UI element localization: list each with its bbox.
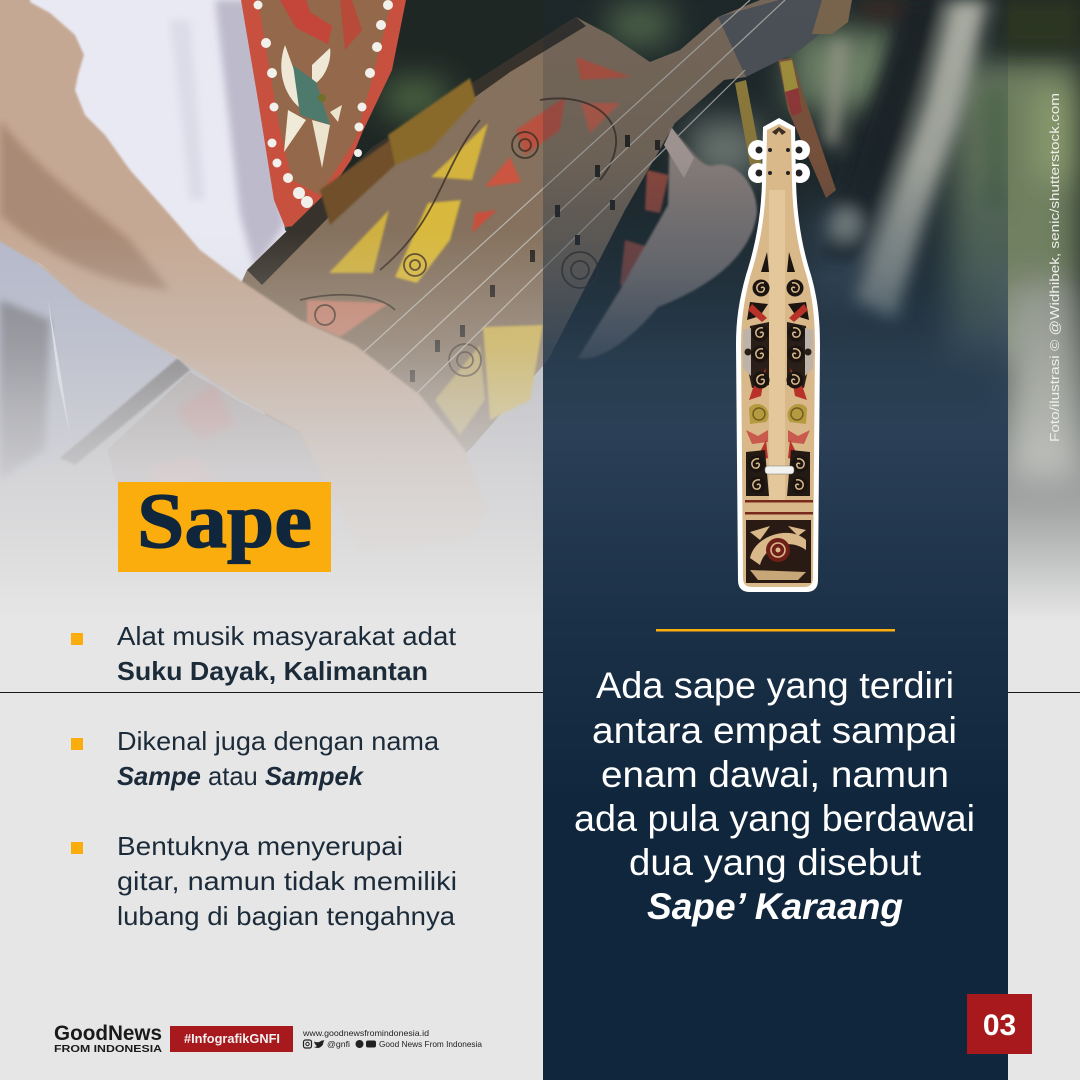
gold divider	[656, 629, 895, 632]
logo: GoodNews From Indonesia	[54, 1022, 162, 1055]
bullet 2: Sampe atau Sampek	[117, 761, 365, 791]
website and social: @gnfi	[327, 1039, 350, 1049]
shirt below arm	[0, 235, 180, 480]
photo credit: Foto/ilustrasi © @Widhibek, senic/shutterstock.com	[1048, 93, 1062, 442]
hashtag badge: #InfografikGNFI	[184, 1032, 280, 1046]
background photo: musician playing sape	[0, 0, 1080, 700]
panel text: string description: antara empat sampai	[592, 710, 957, 751]
panel text: string description: Ada sape yang terdiri	[596, 665, 954, 706]
sape neck head	[718, 0, 825, 77]
bullet 2: Dikenal juga dengan nama	[117, 726, 440, 756]
bullet 2	[71, 726, 440, 791]
right strip plain background	[1008, 620, 1080, 1080]
title badge	[118, 482, 331, 572]
shirt	[0, 0, 295, 360]
website and social: www.goodnewsfromindonesia.id	[302, 1028, 429, 1038]
right strip fade	[1008, 280, 1080, 620]
lower wood piece below arm	[60, 358, 335, 490]
left bottom fade	[0, 230, 543, 620]
tuning peg rings	[748, 140, 810, 183]
bullet list	[71, 621, 457, 931]
page number badge: 03	[983, 1009, 1016, 1042]
logo: GoodNews From Indonesia: FROM INDONESIA	[54, 1043, 162, 1055]
bullet 3: Bentuknya menyerupai	[117, 831, 403, 861]
panel text: string description: Sape’ Karaang	[647, 886, 903, 927]
bullet 1: Suku Dayak, Kalimantan	[117, 656, 428, 686]
panel text: string description: dua yang disebut	[629, 842, 922, 883]
sape end knob	[812, 0, 852, 34]
right hand on strings	[578, 128, 757, 358]
sape body edge	[247, 17, 586, 285]
title: Sape	[118, 477, 331, 572]
wooden body and ornament	[741, 124, 815, 587]
panel text: string description	[574, 665, 975, 927]
arm shading	[0, 120, 170, 290]
page number badge	[967, 994, 1032, 1054]
panel text: string description: enam dawai, namun	[601, 754, 949, 795]
navy panel	[543, 0, 1008, 1080]
carved swirl lines	[300, 98, 616, 376]
horizontal rule right	[1008, 692, 1080, 693]
carving colors	[307, 57, 669, 435]
foreground arm	[0, 0, 488, 555]
website and social: Good News From Indonesia	[379, 1039, 482, 1049]
white sticker outline	[736, 118, 820, 592]
sticks behind neck	[735, 80, 762, 165]
hashtag badge	[170, 1026, 293, 1052]
bullet 1: Alat musik masyarakat adat	[117, 621, 457, 651]
website and social	[302, 1028, 482, 1049]
strings and frets	[355, 0, 785, 400]
bullet 3: lubang di bagian tengahnya	[117, 901, 456, 931]
pickup	[765, 466, 794, 474]
title text: Sape	[137, 477, 312, 564]
footer	[54, 1022, 482, 1055]
bullet 3: gitar, namun tidak memiliki	[117, 866, 457, 896]
sape body	[220, 0, 800, 480]
bullet 1	[71, 621, 457, 686]
horizontal rule left	[0, 692, 543, 693]
logo: GoodNews From Indonesia: GoodNews	[54, 1022, 162, 1045]
bullet 3	[71, 831, 457, 931]
left plain background	[0, 620, 543, 1080]
panel text: string description: ada pula yang berdawai	[574, 798, 975, 839]
vest	[241, 0, 406, 227]
background foliage	[385, 0, 1080, 480]
icon: sape instrument illustration	[735, 118, 825, 598]
